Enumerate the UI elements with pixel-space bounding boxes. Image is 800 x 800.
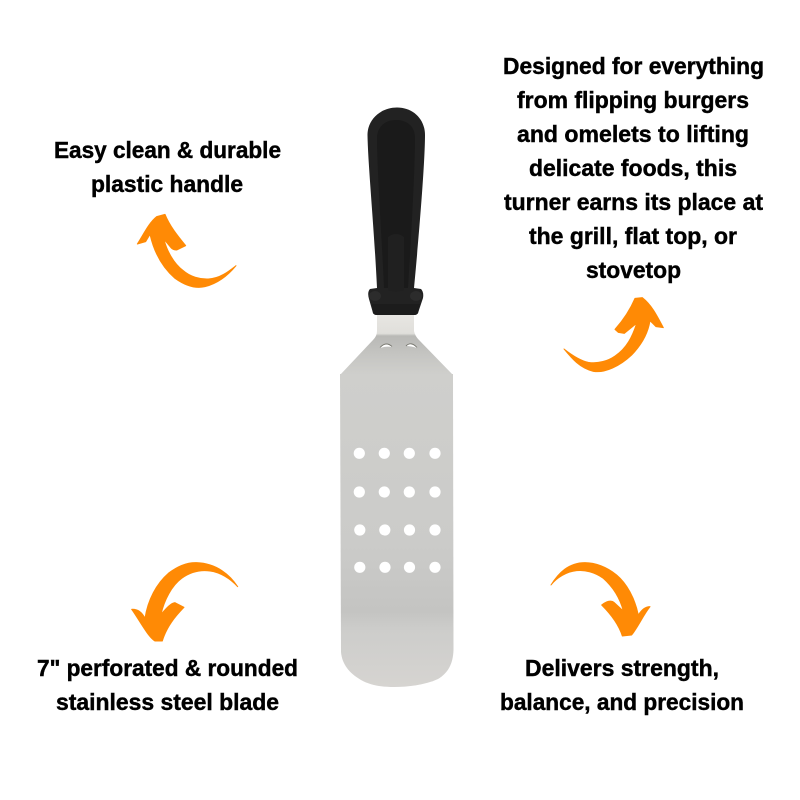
arrow: bottom left <box>132 563 238 641</box>
callout: versatility <box>503 53 764 283</box>
collar ears <box>369 291 422 301</box>
callout: blade: 7" perforated & rounded <box>37 655 298 681</box>
callout: versatility: Designed for everything <box>503 53 764 79</box>
callout: handle: Easy clean & durable <box>54 137 281 163</box>
callout: versatility: from flipping burgers <box>517 87 749 113</box>
blade perforations <box>354 448 441 573</box>
handle dark centre <box>377 120 415 288</box>
black plastic handle <box>368 108 425 315</box>
callout: handle: plastic handle <box>91 171 243 197</box>
callout: versatility: the grill, flat top, or <box>529 223 737 249</box>
arrow: bottom right <box>551 563 650 636</box>
callout: performance <box>500 655 744 715</box>
collar <box>372 304 420 315</box>
shoulder rivet slots <box>380 344 417 348</box>
callout: versatility: stovetop <box>586 257 681 283</box>
callout: performance: balance, and precision <box>500 689 744 715</box>
arrow: top right <box>564 298 663 372</box>
callout: versatility: delicate foods, this <box>529 155 737 181</box>
callout: handle <box>54 137 281 197</box>
stainless steel blade <box>340 374 454 687</box>
callout: blade: stainless steel blade <box>56 689 279 715</box>
spatula turner <box>340 108 454 687</box>
arrow: top left <box>137 214 236 287</box>
callout: blade <box>37 655 298 715</box>
blade neck and shoulder <box>340 314 453 375</box>
callout: versatility: and omelets to lifting <box>517 121 749 147</box>
handle grip groove <box>388 234 404 292</box>
callout: versatility: turner earns its place at <box>504 189 763 215</box>
callout: performance: Delivers strength, <box>525 655 719 681</box>
